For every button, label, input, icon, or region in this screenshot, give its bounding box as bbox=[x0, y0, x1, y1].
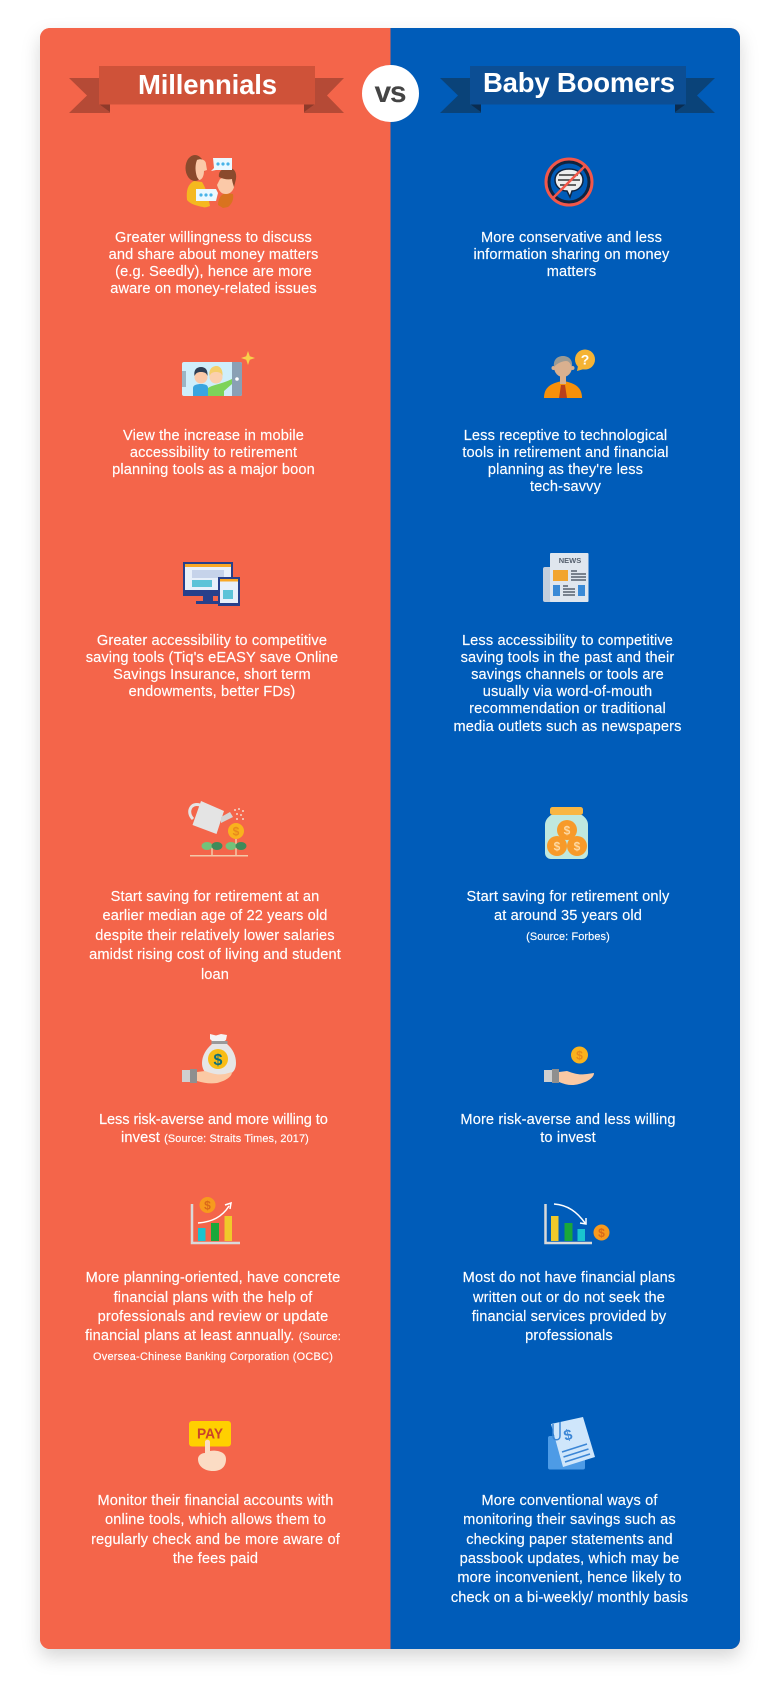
text: tech-savvy: Less receptive to technological bbox=[464, 428, 667, 444]
text: planning oriented: professionals and review or update bbox=[98, 1309, 328, 1325]
text: conservative bbox=[474, 230, 670, 280]
text: mobile accessibility: accessibility to retirement bbox=[130, 445, 297, 461]
banner: Baby Boomers: Baby Boomers bbox=[483, 67, 675, 98]
icon: pay button with finger: PAY bbox=[197, 1426, 223, 1442]
icon: rising bar chart bbox=[192, 1197, 240, 1243]
text: newspapers: media outlets such as newspapers bbox=[453, 719, 682, 735]
text: planning oriented: More planning-oriented, have concrete bbox=[86, 1270, 340, 1286]
text: saving tools: Savings Insurance, short term bbox=[113, 667, 311, 683]
banner: Baby Boomers bbox=[440, 66, 715, 113]
text: start saving 35: Start saving for retirement only bbox=[467, 889, 670, 905]
icon: hand and coin bbox=[544, 1046, 594, 1085]
text: conventional monitoring: passbook updates, which may be bbox=[460, 1551, 679, 1567]
text: no financial plans: financial services provided by bbox=[472, 1309, 667, 1325]
text: start saving 22: loan bbox=[201, 967, 229, 983]
text: mobile accessibility: View the increase in mobile bbox=[123, 428, 304, 444]
banner: Millennials: Millennials bbox=[138, 69, 277, 100]
text: tech-savvy: planning as they're less bbox=[488, 462, 643, 478]
icon: newspaper bbox=[543, 553, 588, 602]
icon: no chat bbox=[546, 159, 592, 205]
text: newspapers: Less accessibility to competitive bbox=[462, 633, 673, 649]
icon: coin jar: $ bbox=[554, 840, 561, 854]
text: conventional monitoring: monitoring their savings such as bbox=[463, 1512, 676, 1528]
text: newspapers: saving tools in the past and their bbox=[461, 650, 674, 666]
text: tech-savvy: tools in retirement and financial bbox=[462, 445, 669, 461]
text: no financial plans: written out or do not seek the bbox=[472, 1290, 665, 1306]
text: discuss money: Greater willingness to discuss bbox=[115, 230, 312, 246]
text: start saving 22: despite their relatively lower salaries bbox=[95, 928, 335, 944]
text: saving tools: Greater accessibility to competitive bbox=[97, 633, 327, 649]
text: saving tools: endowments, better FDs) bbox=[129, 684, 295, 700]
text: tech-savvy bbox=[462, 428, 669, 495]
text: saving tools bbox=[86, 633, 338, 700]
text: mobile accessibility: planning tools as a major boon bbox=[112, 462, 315, 478]
text: more risk-averse bbox=[460, 1112, 676, 1146]
text: conventional monitoring: check on a bi-weekly/ monthly basis bbox=[451, 1590, 688, 1606]
text: saving tools: saving tools (Tiq's eEASY save Online bbox=[86, 650, 338, 666]
icon: falling bar chart bbox=[546, 1204, 610, 1243]
text: start saving 35: (Source: Forbes) bbox=[526, 931, 610, 943]
text: conservative: More conservative and less bbox=[481, 230, 662, 246]
banner: Millennials bbox=[69, 66, 344, 113]
icon: paper statements bbox=[548, 1417, 595, 1470]
text: discuss money: (e.g. Seedly), hence are more bbox=[115, 264, 312, 280]
text: more risk-averse: to invest bbox=[540, 1130, 596, 1146]
text: mobile accessibility bbox=[112, 428, 315, 478]
text: conventional monitoring: more inconvenient, hence likely to bbox=[457, 1570, 682, 1586]
text: less risk-averse: invest (Source: Straits Times, 2017) bbox=[121, 1130, 309, 1146]
text: conservative: information sharing on money bbox=[474, 247, 670, 263]
text: planning oriented bbox=[85, 1270, 341, 1363]
text: monitor online bbox=[91, 1493, 341, 1567]
text: newspapers: usually via word-of-mouth bbox=[483, 684, 652, 700]
text: newspapers bbox=[453, 633, 682, 735]
panel: baby boomers bbox=[390, 28, 740, 1649]
icon: pay button with finger bbox=[189, 1421, 231, 1471]
icon: newspaper: NEWS bbox=[559, 556, 581, 565]
text: start saving 22: earlier median age of 22 years old bbox=[102, 908, 328, 924]
icon: hand holding money bag bbox=[182, 1034, 236, 1083]
icon: watering can with coin plant bbox=[190, 801, 248, 856]
text: conventional monitoring: More conventional ways of bbox=[481, 1493, 658, 1509]
text: discuss money: and share about money matters bbox=[109, 247, 318, 263]
text: discuss money bbox=[109, 230, 318, 297]
text: less risk-averse: Less risk-averse and more willing to bbox=[99, 1112, 328, 1128]
text: start saving 35 bbox=[467, 889, 670, 943]
text: monitor online: regularly check and be more aware of bbox=[91, 1532, 341, 1548]
vs badge bbox=[362, 65, 419, 122]
text: conventional monitoring bbox=[451, 1493, 688, 1606]
icon: watering can with coin plant: $ bbox=[233, 824, 240, 838]
text: conservative: matters bbox=[547, 264, 596, 280]
text: start saving 22: amidst rising cost of living and student bbox=[89, 947, 341, 963]
text: monitor online: online tools, which allows them to bbox=[105, 1512, 326, 1528]
panel: millennials bbox=[40, 28, 391, 1649]
text: start saving 22 bbox=[89, 889, 341, 983]
text: planning oriented: Oversea-Chinese Banking Corporation (OCBC) bbox=[93, 1351, 333, 1363]
text: planning oriented: financial plans at least annually. (Source: bbox=[85, 1328, 341, 1344]
text: start saving 22: Start saving for retirement at an bbox=[111, 889, 319, 905]
text: monitor online: Monitor their financial accounts with bbox=[98, 1493, 334, 1509]
text: tech-savvy: tech-savvy bbox=[530, 479, 602, 495]
icon: hand and coin: $ bbox=[576, 1048, 583, 1062]
icon: coin jar: $ bbox=[564, 824, 571, 838]
icon: phone selfie bbox=[182, 351, 255, 396]
text: newspapers: recommendation or traditional bbox=[469, 701, 666, 717]
text: planning oriented: financial plans with the help of bbox=[114, 1290, 313, 1306]
icon: coin jar: $ bbox=[574, 840, 581, 854]
text: monitor online: the fees paid bbox=[173, 1551, 258, 1567]
vs badge: vs bbox=[374, 76, 406, 109]
text: less risk-averse bbox=[99, 1112, 328, 1146]
text: conventional monitoring: checking paper statements and bbox=[466, 1532, 673, 1548]
icon: monitor and tablet bbox=[183, 562, 240, 606]
text: no financial plans: Most do not have financial plans bbox=[463, 1270, 675, 1286]
icon: hand holding money bag: $ bbox=[214, 1052, 223, 1069]
icon: person with question bbox=[544, 350, 595, 398]
icon: paper statements: $ bbox=[562, 1426, 575, 1445]
text: no financial plans: professionals bbox=[525, 1328, 613, 1344]
text: no financial plans bbox=[463, 1270, 675, 1344]
icon: person with question: ? bbox=[581, 352, 589, 368]
text: discuss money: aware on money-related issues bbox=[110, 281, 317, 297]
text: newspapers: savings channels or tools are bbox=[471, 667, 664, 683]
text: more risk-averse: More risk-averse and less willing bbox=[460, 1112, 676, 1128]
text: start saving 35: at around 35 years old bbox=[494, 908, 642, 924]
icon: coin jar bbox=[545, 807, 588, 859]
icon: falling bar chart: $ bbox=[598, 1226, 605, 1240]
icon: rising bar chart: $ bbox=[204, 1198, 211, 1212]
icon: two people chatting bbox=[186, 155, 236, 208]
